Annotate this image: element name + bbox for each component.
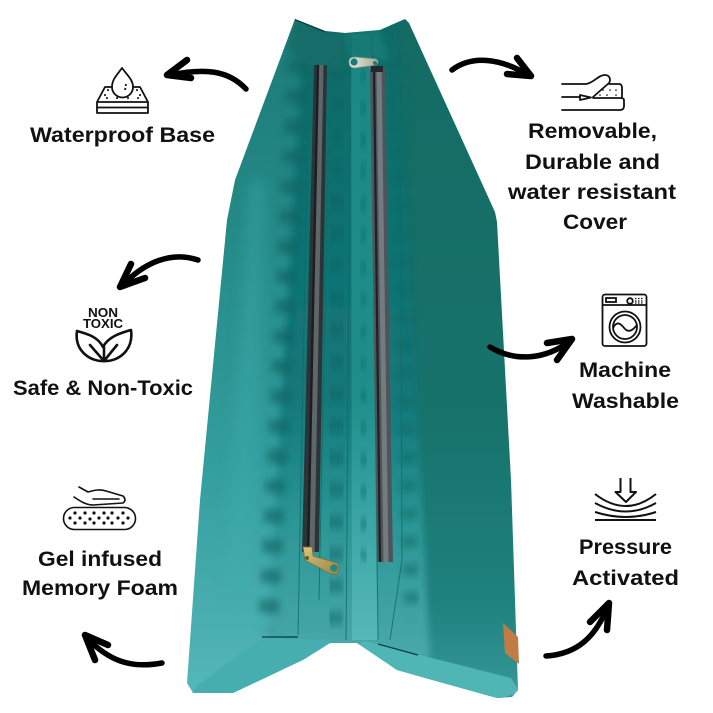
label: gel infused memory foam [22, 548, 178, 600]
arrow: to pressure activated [546, 603, 609, 656]
label: safe and non-toxic: Safe & Non-Toxic [13, 377, 193, 400]
label: pressure activated [572, 536, 679, 590]
arrow: to gel memory foam [85, 635, 162, 665]
label: gel infused memory foam: Memory Foam [22, 577, 178, 600]
top edge shadow [295, 19, 325, 31]
stitch line right [378, 644, 418, 655]
label: gel infused memory foam: Gel infused [38, 548, 162, 571]
arrow: to waterproof base [167, 60, 246, 89]
bottom right face [355, 641, 520, 700]
right panel [390, 10, 525, 710]
label: removable cover: Cover [563, 211, 627, 234]
label: removable cover: Durable and [525, 151, 660, 174]
icon: removable cover [562, 75, 624, 110]
icon: non toxic leaves [77, 305, 131, 361]
label: machine washable [572, 359, 679, 413]
label: machine washable: Machine [579, 359, 671, 382]
icon: non toxic leaves: NON [88, 305, 118, 320]
icon: washing machine [602, 294, 646, 346]
top zipper pull [349, 57, 383, 72]
pillow photo [180, 10, 525, 710]
top left flap [288, 19, 345, 70]
centre left band [333, 35, 340, 640]
label: pressure activated: Pressure [579, 536, 672, 559]
icon: waterproof mattress [97, 68, 148, 113]
icon: hand on gel foam [64, 487, 136, 530]
arrow: to machine washable [490, 339, 572, 360]
right zipper [370, 68, 393, 562]
arrow: to cover [452, 58, 531, 76]
centre panel [265, 10, 430, 660]
left zipper [302, 65, 327, 552]
seams [298, 35, 402, 640]
label: waterproof base: Waterproof Base [30, 124, 215, 147]
icon: pressure [595, 478, 656, 520]
centre light band [351, 35, 378, 640]
right fold ripples [400, 319, 420, 606]
top centre flap [345, 30, 390, 60]
left panel [180, 10, 310, 710]
arrow: to safe and non-toxic [120, 257, 198, 287]
centre band ripples [362, 70, 365, 560]
bottom zipper pull [303, 547, 340, 574]
leather tag [503, 623, 519, 664]
bottom left face [190, 638, 330, 695]
left highlight [244, 184, 264, 382]
label: removable cover: water resistant [507, 181, 676, 204]
label: pressure activated: Activated [572, 567, 679, 590]
label: machine washable: Washable [572, 390, 679, 413]
label: removable cover: Removable, [528, 120, 657, 143]
label: removable cover [507, 120, 676, 234]
icon: non toxic leaves: TOXIC [83, 316, 124, 331]
stitch line left [262, 636, 298, 638]
left fold ripples [268, 60, 298, 630]
